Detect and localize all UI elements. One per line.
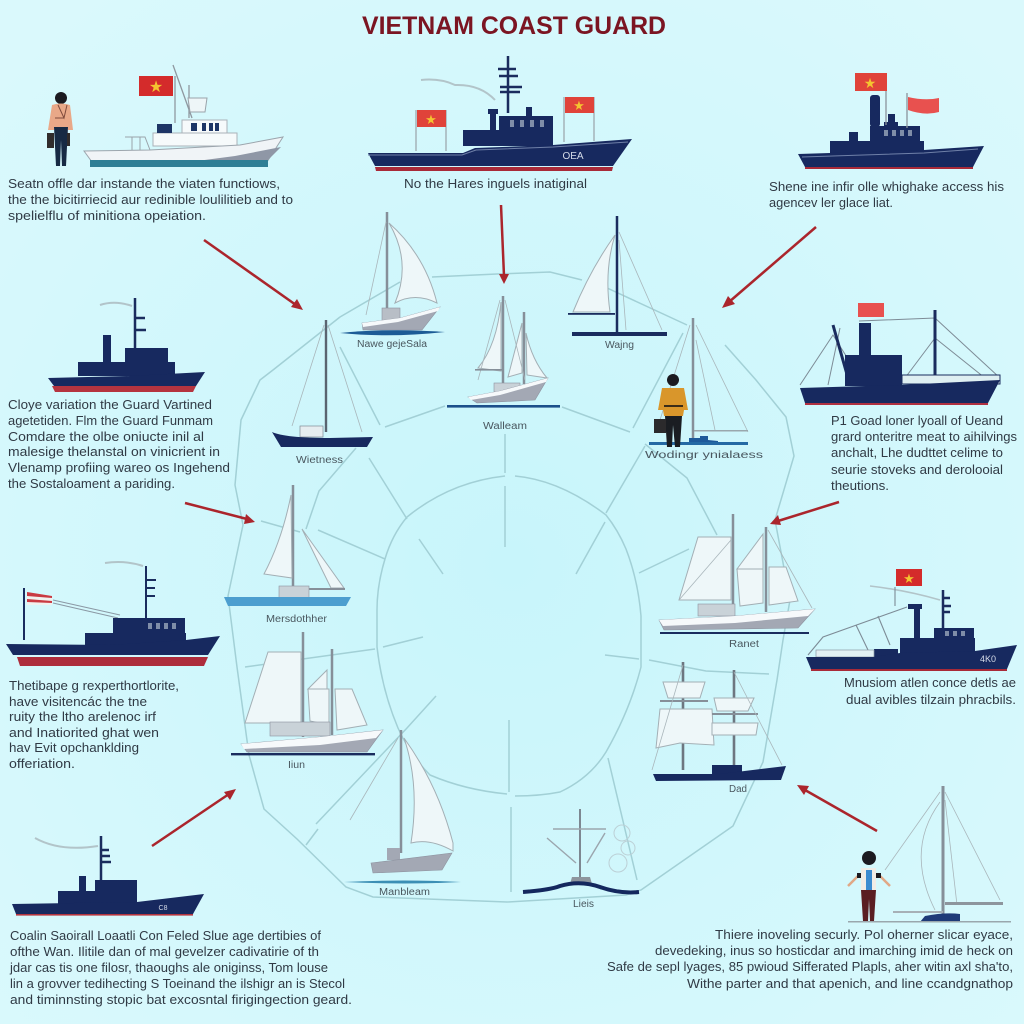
sailboat: Wajng	[568, 216, 667, 351]
arrow: top-centre	[499, 205, 509, 284]
arrow: middle-left	[185, 503, 255, 524]
icon: flag	[139, 76, 173, 96]
text block: malesige thelanstal on vinicrient in	[8, 445, 220, 459]
sailboat: Iiun	[231, 632, 383, 771]
label: Wajng	[605, 340, 634, 351]
icon: flag right	[565, 97, 594, 113]
text block	[8, 398, 230, 491]
label: Ranet	[729, 639, 759, 650]
sailboat: Ranet	[659, 514, 815, 650]
sailboat with crew: Wodingr ynialaess	[645, 318, 763, 461]
sailboat: Lieis	[523, 809, 639, 910]
icon: officer	[47, 92, 73, 166]
panel: bottom-left ship and note	[9, 836, 352, 1007]
icon: navy ship	[368, 56, 632, 171]
text block: Thetibape g rexperthortlorite,	[9, 679, 179, 693]
label: Mersdothher	[266, 614, 328, 625]
label: Dad	[729, 784, 747, 795]
label: Wietness	[296, 455, 343, 466]
text block: grard onteritre meat to aihilvings	[831, 430, 1017, 444]
text block: and Inatiorited ghat wen	[9, 726, 159, 740]
text block	[607, 928, 1013, 991]
panel: lower-left ship and note	[6, 562, 220, 771]
text block: Seatn offle dar instande the viaten functiows,	[8, 177, 280, 191]
text block: spelielflu of minitiona opeiation.	[8, 209, 206, 223]
sailboat: Wietness	[272, 320, 373, 466]
arrows	[152, 205, 877, 846]
panel: top-right ship and note	[769, 73, 1004, 210]
icon: flag left: ★	[425, 112, 437, 127]
arrow: top-right	[722, 227, 816, 308]
label: Lieis	[573, 899, 594, 910]
text block: the the bicitirriecid aur redinible loulilitieb and to	[8, 193, 293, 207]
text block: Comdare the olbe oniucte inil al	[8, 430, 204, 444]
text block: seurie stoveks and derolooial	[831, 463, 1003, 477]
icon: navy ship	[806, 586, 1017, 671]
text block: Shene ine infir olle whighake access his	[769, 180, 1004, 194]
label: Walleam	[483, 421, 527, 432]
sailboat: Mersdothher	[224, 485, 351, 625]
icon: flag right: ★	[573, 98, 585, 113]
icon: crew member	[654, 374, 688, 447]
text block	[831, 414, 1017, 493]
text block: Cloye variation the Guard Vartined	[8, 398, 212, 412]
icon: navy trawler	[800, 310, 1000, 405]
text block	[8, 177, 293, 223]
text block: Withe parter and that apenich, and line ccandgnathop	[687, 977, 1013, 991]
label: Iiun	[288, 760, 305, 771]
text block	[9, 679, 179, 771]
text block: ruity the ltho arelenoc irf	[9, 710, 157, 724]
text block: and timinnsting stopic bat excosntal firigingection geard.	[10, 993, 352, 1007]
icon: flag	[896, 569, 922, 586]
text block: devedeking, inus so hosticdar and imarching imid de heck on	[655, 944, 1013, 958]
sailboat: Manbleam	[344, 730, 461, 898]
icon: flag	[858, 303, 884, 317]
text block: theutions.	[831, 479, 889, 493]
network diagram	[228, 272, 794, 902]
text block: jdar cas tis one filosr, thaoughs ale oniginss, Tom louse	[9, 961, 328, 975]
text block: offeriation.	[9, 757, 75, 771]
icon: flag: ★	[903, 571, 915, 586]
text block: Safe de sepl lyages, 85 pwioud Sifferated Plapls, aher witin axl sha'to,	[607, 960, 1013, 974]
icon: sailboat	[848, 786, 1011, 922]
icon: navy ship	[12, 836, 204, 916]
icon: flag: ★	[149, 79, 163, 96]
icon: white patrol boat	[84, 65, 283, 167]
sailboat: Nawe gejeSala	[340, 212, 445, 350]
icon: navy ship: C8	[159, 905, 168, 912]
icon: navy ship	[48, 298, 205, 392]
text block	[9, 929, 352, 1007]
icon: navy ship	[6, 562, 220, 666]
icon: navy ship: OEA	[562, 151, 584, 162]
icon: flag left	[855, 73, 887, 91]
label: Manbleam	[379, 887, 430, 898]
icon: flag right	[908, 97, 939, 114]
text block: No the Hares inguels inatiginal	[404, 177, 587, 191]
text block: agetetiden. Flm the Guard Funmam	[8, 414, 213, 428]
text block: ofthe Wan. Ilitile dan of mal gevelzer cadivatirie of th	[10, 945, 319, 959]
text block: anchalt, Lhe dudttet celime to	[831, 446, 1003, 460]
arrow: top-left	[204, 240, 303, 310]
sailboat: Walleam	[447, 296, 560, 432]
text block: Thiere inoveling securly. Pol oherner slicar eyace,	[715, 928, 1013, 942]
text block	[844, 676, 1016, 707]
icon: navy ship	[798, 91, 984, 169]
text block: lin a grovver tedihecting S Toeinand the ilshigr an is Stecol	[10, 977, 345, 991]
text block: Mnusiom atlen conce detls ae	[844, 676, 1016, 690]
sailboat: Dad	[652, 662, 786, 795]
arrow: lower-left	[152, 789, 236, 846]
title: VIETNAM COAST GUARD	[362, 12, 666, 40]
icon: person	[848, 851, 890, 921]
panel: lower-right ship and note	[806, 569, 1017, 707]
text block: the Sostaloament a pariding.	[8, 477, 175, 491]
arrow: middle-right	[770, 502, 839, 525]
text block: Coalin Saoirall Loaatli Con Feled Slue age dertibies of	[10, 929, 322, 943]
arrow: lower-right	[797, 785, 877, 831]
panel: bottom-right person, boat and note	[607, 786, 1013, 991]
text block: P1 Goad loner lyoall of Ueand	[831, 414, 1003, 428]
panel: top-left ship and note	[8, 65, 293, 223]
label: Wodingr ynialaess	[645, 450, 763, 461]
icon: flag left: ★	[864, 75, 876, 91]
text block: dual avibles tilzain phracbils.	[846, 693, 1016, 707]
panel: right ship and note	[800, 303, 1017, 493]
text block: agencev ler glace liat.	[769, 196, 893, 210]
panel: left ship and note	[8, 298, 230, 491]
text block	[769, 180, 1004, 210]
text block: have visitencác the tne	[9, 695, 147, 709]
text block: Vlenamp profiing wareo os Ingehend	[8, 461, 230, 475]
icon: flag	[27, 592, 52, 605]
icon: navy ship: 4K0	[980, 654, 996, 664]
label: Nawe gejeSala	[357, 339, 427, 350]
icon: flag left	[417, 110, 446, 127]
panel: top-centre ship and note	[368, 56, 632, 191]
text block: hav Evit opchanklding	[9, 741, 139, 755]
